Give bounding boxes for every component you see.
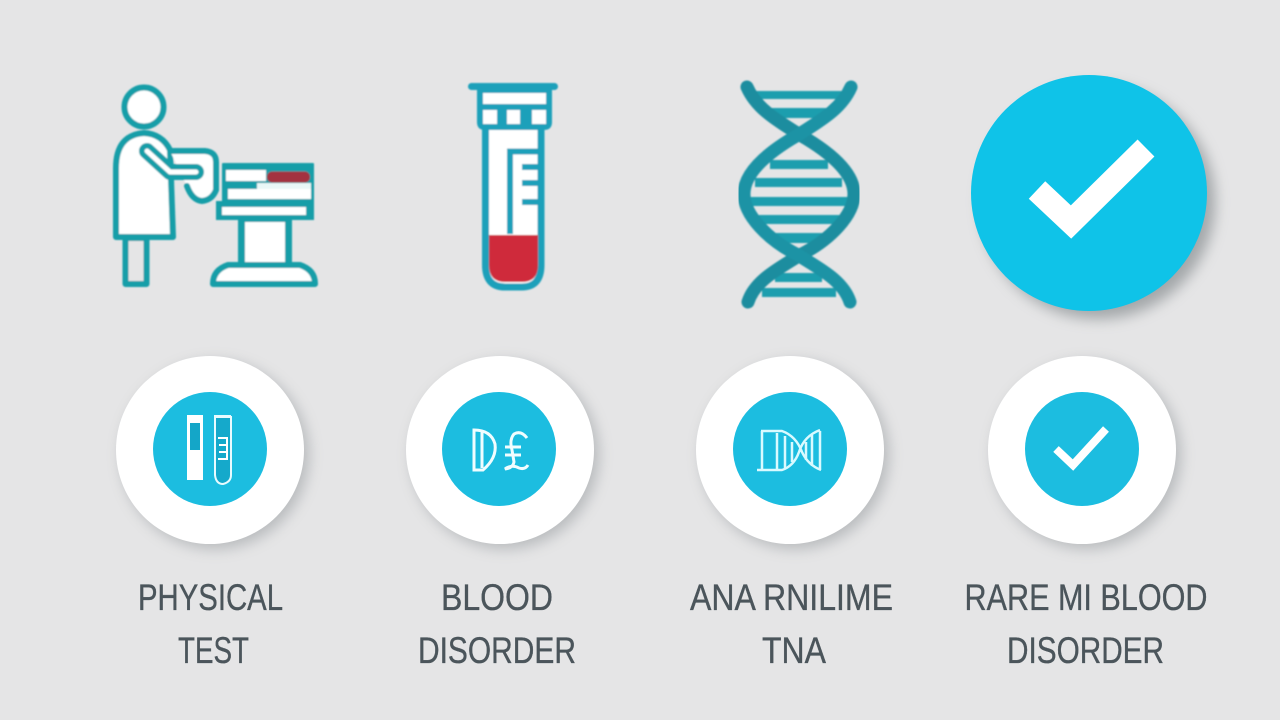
label: blood disorder: DISORDER — [418, 630, 576, 671]
label: rare mi blood disorder: DISORDER — [1007, 630, 1164, 671]
check mark — [1056, 429, 1106, 465]
shadow — [121, 361, 309, 549]
cyan disc — [442, 392, 556, 506]
tube glass — [486, 124, 541, 287]
shadow — [701, 361, 889, 549]
white ring — [406, 356, 594, 544]
left vial — [187, 415, 203, 480]
label: physical test: TEST — [178, 630, 249, 671]
person body — [116, 133, 173, 237]
helix rungs — [748, 91, 850, 297]
person arm — [147, 151, 196, 172]
label: rare mi blood disorder: RARE MI BLOOD — [964, 577, 1208, 618]
label: physical test — [138, 577, 283, 671]
DNA outline — [757, 430, 821, 470]
exam table top — [222, 163, 314, 203]
label: rare mi blood disorder — [964, 577, 1208, 671]
graduation scale — [510, 152, 540, 234]
cyan disc — [153, 392, 267, 506]
D pound glyphs — [474, 430, 495, 470]
label: ana rnilime tna: ANA RNILIME — [690, 577, 893, 618]
person legs — [126, 238, 146, 284]
cyan disc — [733, 392, 847, 506]
badge shadow — [981, 85, 1215, 319]
label: ana rnilime tna — [690, 577, 893, 671]
icon: DNA helix — [744, 87, 854, 302]
right tube — [214, 416, 231, 484]
helix strands — [747, 87, 854, 302]
icon: blood test tube — [468, 83, 558, 287]
cyan disc — [1025, 392, 1139, 506]
exam table base — [213, 265, 315, 284]
person hands — [170, 151, 216, 201]
tube cap — [468, 83, 558, 130]
label: blood disorder — [418, 577, 576, 671]
blood — [489, 235, 538, 282]
step 4 badge: check — [988, 356, 1181, 549]
label: blood disorder: BLOOD — [441, 577, 553, 618]
tube scale — [218, 438, 227, 459]
shadow — [993, 361, 1181, 549]
red strip on table — [267, 172, 310, 182]
label: ana rnilime tna: TNA — [762, 630, 826, 671]
step 1 badge: test tubes — [116, 356, 309, 549]
icon: physical examination — [116, 88, 315, 284]
white ring — [116, 356, 304, 544]
white ring — [988, 356, 1176, 544]
shadow — [411, 361, 599, 549]
white ring — [696, 356, 884, 544]
label: physical test: PHYSICAL — [138, 577, 283, 618]
exam table pedestal — [238, 219, 292, 265]
badge disc — [971, 75, 1207, 311]
step 3 badge: DNA — [696, 356, 889, 549]
check mark — [1037, 148, 1146, 222]
icon: large check badge — [971, 75, 1215, 319]
person head — [124, 88, 164, 126]
exam table deck — [216, 201, 314, 220]
step 2 badge: glyphs — [406, 356, 599, 549]
